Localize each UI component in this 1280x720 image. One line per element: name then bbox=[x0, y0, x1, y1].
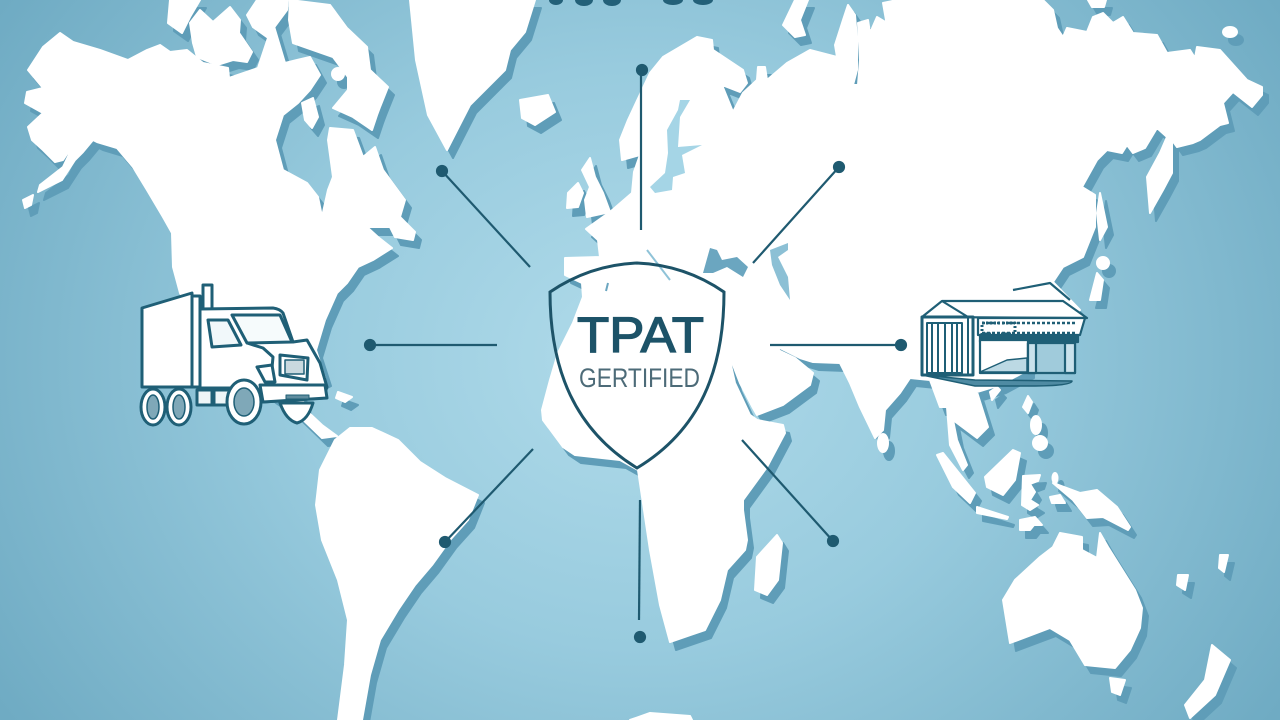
connector: west bbox=[365, 340, 497, 350]
badge subtitle: GERTIFIED bbox=[579, 363, 700, 393]
inland sea: Baltic bbox=[650, 100, 702, 193]
inland sea: Caspian bbox=[770, 243, 790, 300]
top cut-off marks bbox=[549, 0, 713, 6]
connector: north bbox=[637, 65, 647, 230]
truck wheels bbox=[141, 380, 261, 425]
connector: south-east bbox=[742, 440, 838, 546]
connector: east bbox=[770, 340, 906, 350]
connector: south bbox=[635, 500, 645, 642]
connector lines bbox=[365, 65, 906, 642]
inland sea: Black Sea bbox=[703, 248, 748, 277]
shield badge bbox=[550, 263, 724, 468]
connector: south-west bbox=[440, 449, 533, 547]
connector: north-west bbox=[437, 166, 530, 267]
connector: north-east bbox=[753, 162, 844, 263]
badge title: TPAT bbox=[577, 307, 704, 363]
icon: truck bbox=[141, 285, 327, 425]
icon: warehouse bbox=[922, 283, 1087, 386]
